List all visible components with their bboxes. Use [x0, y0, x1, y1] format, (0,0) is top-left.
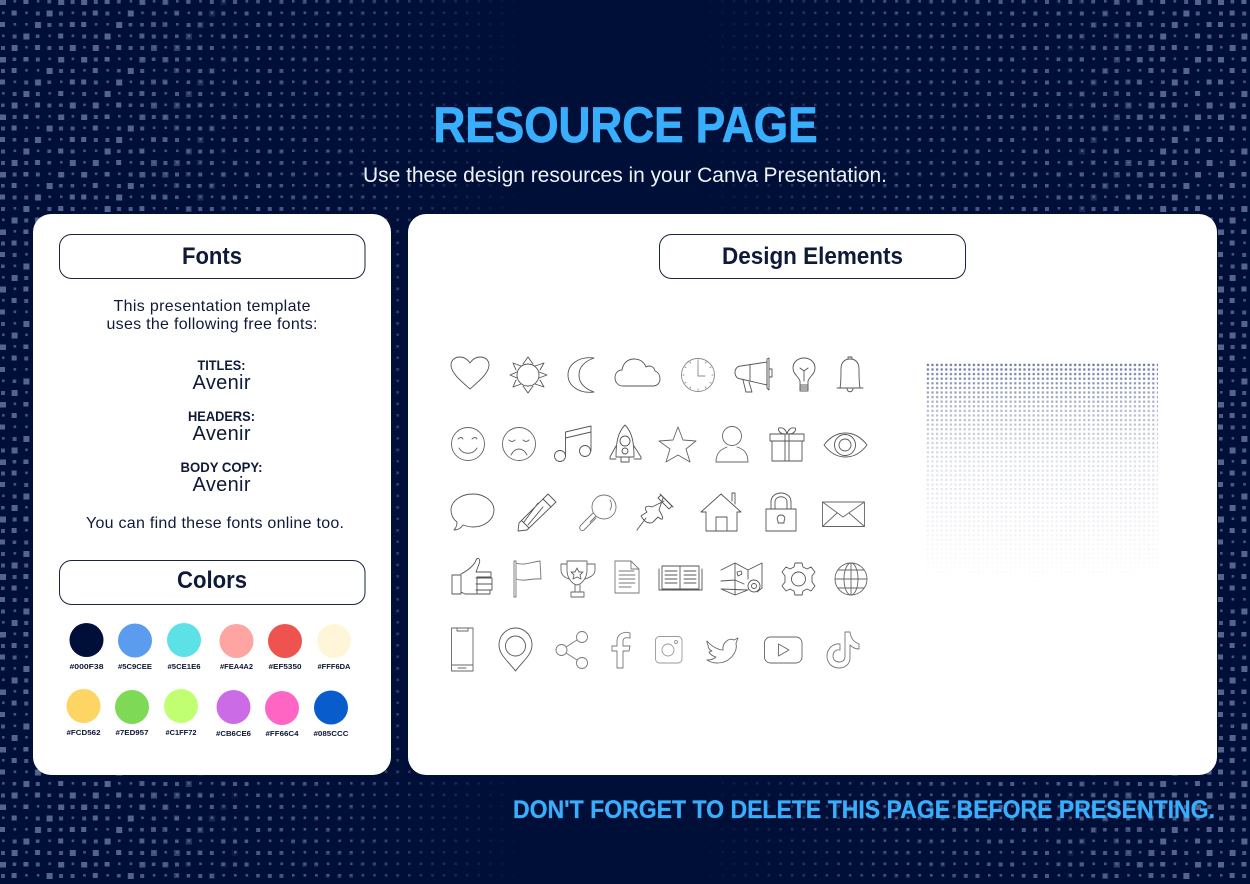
icon: gear — [782, 563, 815, 595]
icon: map — [721, 563, 762, 595]
icon: speech bubble — [451, 494, 494, 530]
icon: music notes — [554, 426, 591, 462]
icon: pencil — [518, 494, 556, 531]
icon: person — [716, 426, 748, 462]
icon: padlock — [766, 493, 796, 531]
text: titles font: TITLES: — [198, 357, 246, 373]
color swatches: #085CCC — [314, 731, 348, 738]
icon: sun — [510, 357, 547, 393]
color swatches: #EF5350 — [268, 664, 302, 671]
icon: open book — [659, 566, 702, 590]
heading: colors — [60, 560, 365, 604]
subtitle: Use these design resources in your Canva Presentation. — [363, 164, 887, 187]
color swatches: #7ED957 — [116, 730, 149, 737]
text: body copy font: BODY COPY: — [180, 459, 262, 475]
color swatches — [66, 623, 351, 738]
text: body copy font — [180, 459, 262, 496]
text: body copy font: Avenir — [192, 474, 251, 496]
text: font intro: This presentation template — [114, 298, 311, 315]
color swatches: #C1FF72 — [166, 730, 197, 737]
text: font intro — [106, 298, 318, 333]
icon: thumbs up — [452, 558, 492, 594]
text: fonts note: You can find these fonts online too. — [86, 515, 344, 532]
icon: youtube — [764, 637, 802, 663]
icon: globe — [835, 563, 867, 595]
panel: design elements — [408, 214, 1217, 775]
icon: star — [659, 427, 696, 462]
icon: magnifier — [580, 495, 616, 531]
text: headers font: Avenir — [192, 423, 251, 445]
icon: moon — [568, 358, 594, 392]
icon: smile — [452, 428, 484, 460]
panel: fonts and colors — [33, 214, 391, 775]
icon: phone — [452, 628, 473, 671]
icon: cloud — [615, 359, 660, 386]
heading: design elements: Design Elements — [722, 243, 903, 270]
text: titles font — [192, 357, 251, 394]
icon: twitter — [707, 638, 738, 663]
color swatches: #5C9CEE — [118, 664, 152, 671]
icon: share — [556, 632, 588, 668]
icon: bulb — [793, 358, 815, 391]
icon: document — [615, 561, 639, 593]
icon: house — [701, 493, 741, 531]
icon: envelope — [822, 502, 864, 526]
text: font intro: uses the following free fonts: — [106, 316, 318, 333]
icon: heart — [451, 357, 489, 389]
heading: design elements — [660, 234, 966, 278]
color swatches: #CB6CE6 — [216, 731, 251, 738]
icon: flag — [514, 561, 541, 597]
icon: sad — [502, 428, 536, 460]
color swatches: #FEA4A2 — [220, 664, 253, 671]
text: headers font: HEADERS: — [188, 408, 255, 424]
icon: rocket — [610, 425, 641, 462]
color swatches: #FCD562 — [66, 730, 101, 737]
icon: clock — [682, 358, 714, 392]
heading: colors: Colors — [177, 567, 247, 594]
color swatches: #FFF6DA — [318, 664, 350, 671]
icon: eye — [824, 433, 867, 457]
halftone gradient swatch — [926, 364, 1158, 550]
heading: fonts — [60, 234, 365, 278]
icon: gift — [770, 428, 804, 461]
icon: map pin — [499, 628, 532, 671]
color swatches: #5CE1E6 — [168, 664, 201, 671]
icon: bell — [837, 357, 863, 392]
icon: trophy — [561, 561, 595, 597]
color swatches: #000F38 — [70, 664, 104, 671]
icon: megaphone — [735, 358, 772, 392]
text: titles font: Avenir — [192, 372, 251, 394]
title: RESOURCE PAGE — [434, 97, 818, 153]
heading: fonts: Fonts — [182, 243, 242, 270]
icon: pushpin — [637, 494, 673, 530]
color swatches: #FF66C4 — [266, 731, 299, 738]
icon: facebook — [612, 632, 630, 668]
icon: tiktok — [827, 632, 859, 668]
icon: instagram — [656, 636, 682, 663]
text: headers font — [188, 408, 255, 445]
